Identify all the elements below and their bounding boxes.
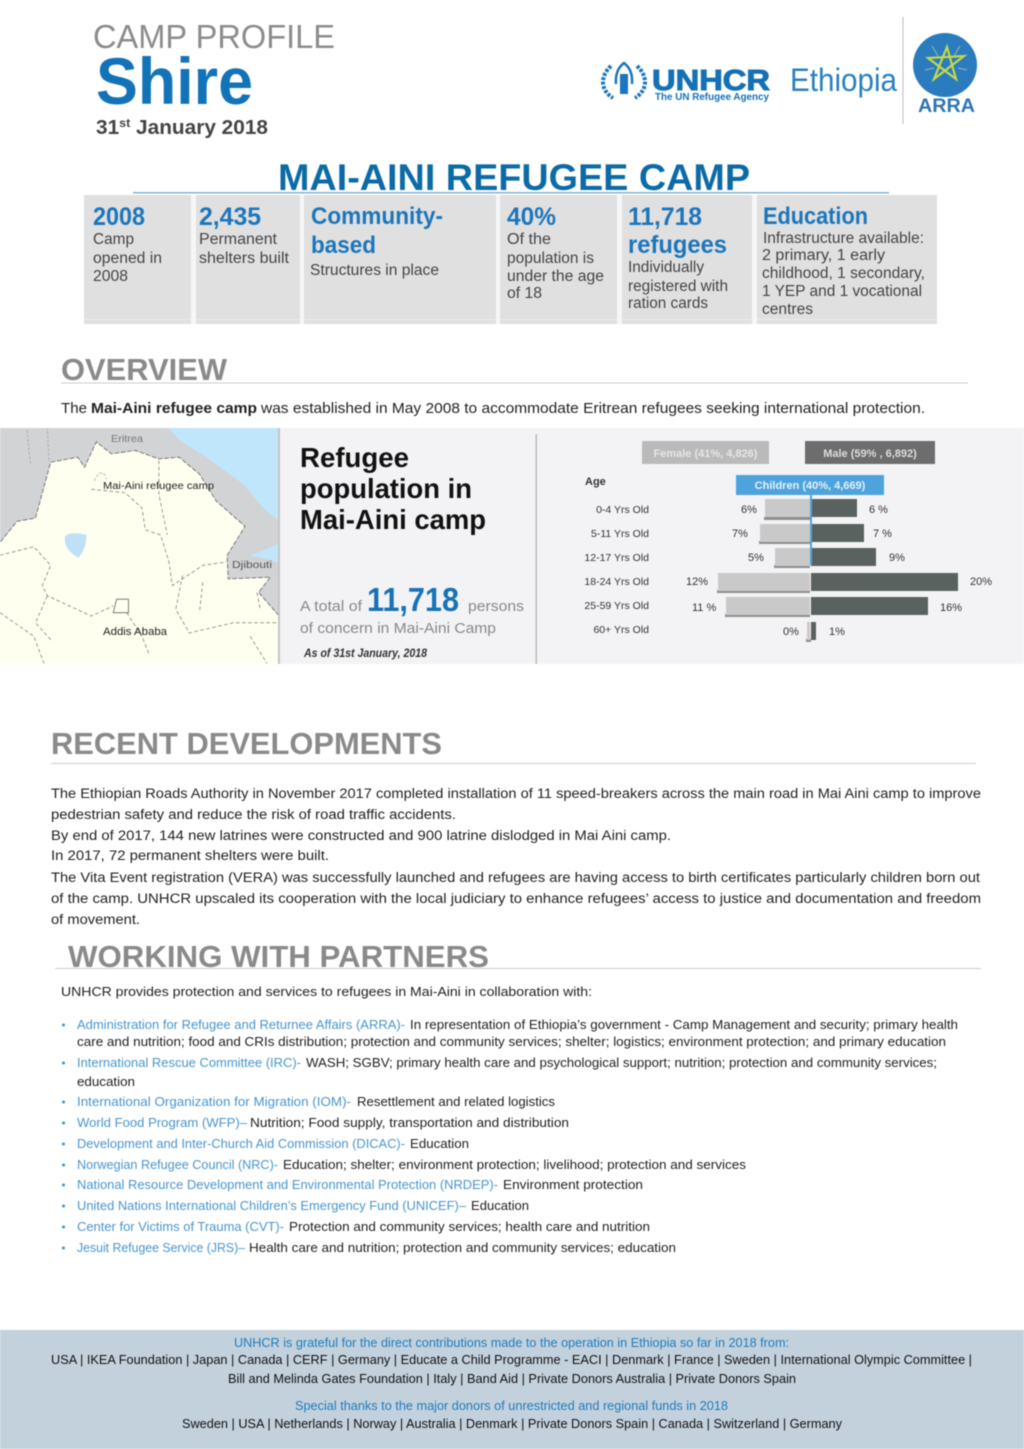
partner: DICAC: Development and Inter-Church Aid Commission (DICAC)- — [77, 1137, 405, 1151]
partners intro: UNHCR provides protection and services to refugees in Mai-Aini in collaboration with: — [61, 985, 592, 999]
footer: donors — [0, 1330, 1024, 1449]
partner: WFP: World Food Program (WFP)– — [77, 1116, 247, 1130]
stat: 2,435: Permanent — [199, 231, 278, 248]
overview text: was established in May 2008 to accommodate Eritrean refugees seeking international protection. — [260, 400, 925, 417]
partner: JRS — [77, 1241, 676, 1255]
logo text: UNHCR: UNHCR — [652, 65, 770, 97]
heading: overview: OVERVIEW — [61, 352, 228, 387]
partner: WFP — [77, 1116, 569, 1130]
logos: UNHCR, Ethiopia, ARRA — [603, 17, 977, 124]
special thanks line: Special thanks to the major donors of unrestricted and regional funds in 2018 — [295, 1398, 728, 1413]
population heading: Refugee — [300, 442, 409, 473]
percent labels: 5% — [748, 552, 764, 564]
stat: 11,718 refugees: ration cards — [628, 295, 708, 312]
percent labels: 1% — [829, 626, 845, 638]
percent labels: 6 % — [869, 504, 888, 516]
chart: population pyramid — [584, 441, 992, 642]
legend: female — [642, 441, 769, 464]
partner: NRC — [77, 1158, 746, 1172]
icon: UNHCR emblem — [603, 63, 645, 98]
stat: 2,435: shelters built — [199, 250, 290, 267]
partner: NRDEP: Environment protection — [503, 1178, 643, 1192]
percent labels: 0% — [783, 626, 799, 638]
percent labels: 11 % — [692, 602, 716, 614]
stat: 11,718 refugees: Individually — [628, 259, 704, 276]
stat: 40%: 40% — [507, 203, 556, 231]
logo text: ARRA: ARRA — [918, 96, 975, 117]
partner: NRC: Norwegian Refugee Council (NRC)- — [77, 1158, 278, 1172]
partner: IOM: Resettlement and related logistics — [357, 1095, 555, 1109]
axis title: age: Age — [585, 476, 606, 488]
partner: IRC: education — [77, 1075, 135, 1089]
partner: CVT: Protection and community services; health care and nutrition — [289, 1220, 650, 1234]
camp title: MAI-AINI REFUGEE CAMP — [278, 157, 750, 198]
population total callout: persons — [468, 598, 524, 615]
overview text: The — [61, 400, 87, 417]
partner: ARRA: In representation of Ethiopia’s government - Camp Management and security; primary health — [410, 1018, 958, 1032]
stat: 11,718 refugees: registered with — [628, 278, 728, 295]
recent developments text: By end of 2017, 144 new latrines were constructed and 900 latrine dislodged in Mai Aini camp. — [51, 828, 671, 843]
stat: 2,435: 2,435 — [199, 203, 261, 231]
map of northern Ethiopia — [0, 427, 282, 670]
legend: male — [805, 441, 935, 464]
percent labels — [686, 504, 992, 638]
partner: ARRA: Administration for Refugee and Returnee Affairs (ARRA)- — [77, 1018, 405, 1032]
percent labels: 16% — [940, 602, 962, 614]
stat: 2008: opened in — [93, 250, 162, 267]
stat: 11,718 refugees: 11,718 — [628, 203, 702, 231]
population total callout: of concern in Mai-Aini Camp — [300, 620, 496, 637]
population total callout: As of 31st January, 2018 — [303, 646, 427, 660]
age labels: 5-11 Yrs Old — [591, 528, 649, 540]
recent developments text: pedestrian safety and reduce the risk of road traffic accidents. — [51, 807, 456, 822]
heading: working with partners: WORKING WITH PARTNERS — [68, 939, 489, 974]
donors list: USA | IKEA Foundation | Japan | Canada | CERF | Germany | Educate a Child Programme - EACI | Denmark | France | Sweden | International Olympic Committee | — [51, 1352, 972, 1367]
age labels: 18-24 Yrs Old — [584, 576, 649, 588]
map label: Addis Ababa: Addis Ababa — [103, 626, 168, 638]
legend: children: Children (40%, 4,669) — [755, 480, 866, 492]
map label: Eritrea: Eritrea — [111, 434, 143, 445]
population heading: population in — [300, 473, 472, 504]
stat: 11,718 refugees — [628, 203, 728, 312]
stat: 2,435 — [199, 203, 290, 267]
recent developments text — [51, 786, 981, 927]
stat: education: Education — [763, 203, 868, 230]
overview text: Mai-Aini refugee camp — [91, 400, 257, 417]
population total callout — [300, 581, 524, 660]
partner: JRS: Health care and nutrition; protection and community services; education — [249, 1241, 676, 1255]
stat: 40%: under the age — [507, 268, 604, 285]
recent developments text: of movement. — [51, 912, 140, 927]
recent developments text: of the camp. UNHCR upscaled its cooperation with the local judiciary to enhance refugees’ access to justice and documentation and freedom — [51, 891, 981, 906]
legend: female: Female (41%, 4,826) — [654, 448, 758, 460]
stat: 2008: 2008 — [93, 268, 128, 285]
population total callout: A total of — [300, 598, 363, 615]
legend: male: Male (59% , 6,892) — [823, 448, 917, 460]
population heading — [300, 442, 486, 535]
partner: UNICEF: United Nations International Children’s Emergency Fund (UNICEF)– — [77, 1199, 466, 1213]
percent labels: 7% — [732, 528, 748, 540]
header: camp profile title: Shire — [96, 44, 253, 118]
partner: NRDEP: National Resource Development and Environmental Protection (NRDEP)- — [77, 1178, 498, 1192]
tagline: The UN Refugee Agency — [655, 92, 769, 103]
partner: DICAC: Education — [410, 1137, 469, 1151]
header: camp profile title: January 2018 — [130, 117, 268, 139]
heading: recent developments: RECENT DEVELOPMENTS — [51, 726, 442, 761]
partner: IOM — [77, 1095, 555, 1109]
partner: JRS: Jesuit Refugee Service (JRS)– — [77, 1241, 245, 1255]
partner: ARRA: care and nutrition; food and CRIs distribution; protection and community services; shelter; logistics; environment protection; and primary education — [77, 1035, 946, 1049]
stat: 40%: population is — [507, 250, 594, 267]
stat: education: 1 YEP and 1 vocational — [762, 283, 922, 300]
partner: IRC — [77, 1056, 937, 1089]
bars: male — [811, 499, 958, 640]
map label: Djibouti: Djibouti — [232, 560, 272, 571]
country label: Ethiopia — [790, 62, 897, 98]
stat: education: 2 primary, 1 early — [762, 247, 885, 264]
header: camp profile title: st — [119, 116, 130, 130]
stat: 40%: of 18 — [507, 285, 542, 302]
recent developments text: The Ethiopian Roads Authority in November 2017 completed installation of 11 speed-breakers across the main road in Mai Aini camp to improve — [51, 786, 981, 801]
partner: IRC: WASH; SGBV; primary health care and psychological support; nutrition; protection and community services; — [306, 1056, 937, 1070]
stat: community-based: based — [311, 232, 376, 259]
stat: community-based: Structures in place — [310, 262, 439, 279]
major donors list: Sweden | USA | Netherlands | Norway | Australia | Denmark | Private Donors Spain | Canada | Switzerland | Germany — [182, 1416, 842, 1431]
bars: female — [717, 499, 811, 642]
age labels: 25-59 Yrs Old — [584, 600, 649, 612]
age labels: 60+ Yrs Old — [593, 624, 649, 636]
stat: community-based: Community- — [311, 203, 443, 230]
map label: camp: Mai-Aini refugee camp — [103, 481, 214, 492]
age labels: 0-4 Yrs Old — [596, 504, 649, 516]
partner: WFP: Nutrition; Food supply, transportation and distribution — [250, 1116, 569, 1130]
donors list: Bill and Melinda Gates Foundation | Italy | Band Aid | Private Donors Australia | Private Donors Spain — [228, 1371, 796, 1386]
stat: education — [762, 203, 925, 318]
age labels — [584, 504, 649, 636]
icon: ARRA seal — [913, 33, 977, 97]
header: camp profile title: CAMP PROFILE — [93, 18, 335, 55]
stat: 2008: Camp — [93, 231, 134, 248]
partners list — [62, 1018, 958, 1255]
partner: CVT: Center for Victims of Trauma (CVT)- — [77, 1220, 284, 1234]
percent labels: 7 % — [873, 528, 892, 540]
partner: IOM: International Organization for Migration (IOM)- — [77, 1095, 351, 1109]
partner: NRC: Education; shelter; environment protection; livelihood; protection and services — [283, 1158, 746, 1172]
stat: education: childhood, 1 secondary, — [762, 265, 925, 282]
stat: 11,718 refugees: refugees — [628, 231, 727, 259]
age labels: 12-17 Yrs Old — [584, 552, 649, 564]
population heading: Mai-Aini camp — [300, 504, 486, 535]
stat: education: centres — [762, 301, 813, 318]
partner: IRC: International Rescue Committee (IRC)- — [77, 1056, 301, 1070]
stat: 40%: Of the — [507, 231, 551, 248]
stat: education: Infrastructure available: — [763, 230, 924, 247]
percent labels: 12% — [686, 576, 708, 588]
panel background: population — [280, 428, 1024, 664]
header: camp profile title: 31 — [96, 117, 118, 139]
donors list — [51, 1352, 972, 1386]
recent developments text: In 2017, 72 permanent shelters were built. — [51, 848, 329, 863]
partner: ARRA — [77, 1018, 958, 1049]
partner: UNICEF: Education — [471, 1199, 529, 1213]
recent developments text: The Vita Event registration (VERA) was successfully launched and refugees are having access to birth certificates particularly children born out — [51, 870, 980, 885]
population total callout: 11,718 — [367, 581, 459, 618]
legend: children — [736, 475, 884, 495]
header: camp profile title — [93, 18, 335, 139]
stat: 2008 — [93, 203, 162, 285]
panel: key figures — [84, 195, 937, 324]
stat: 40% — [507, 203, 604, 302]
partner: CVT — [77, 1220, 650, 1234]
percent labels: 20% — [970, 576, 992, 588]
percent labels: 9% — [889, 552, 905, 564]
percent labels: 6% — [741, 504, 757, 516]
stat: community-based — [310, 203, 443, 279]
donors thanks line: UNHCR is grateful for the direct contributions made to the operation in Ethiopia so far in 2018 from: — [234, 1335, 789, 1350]
stat: 2008: 2008 — [93, 203, 145, 231]
